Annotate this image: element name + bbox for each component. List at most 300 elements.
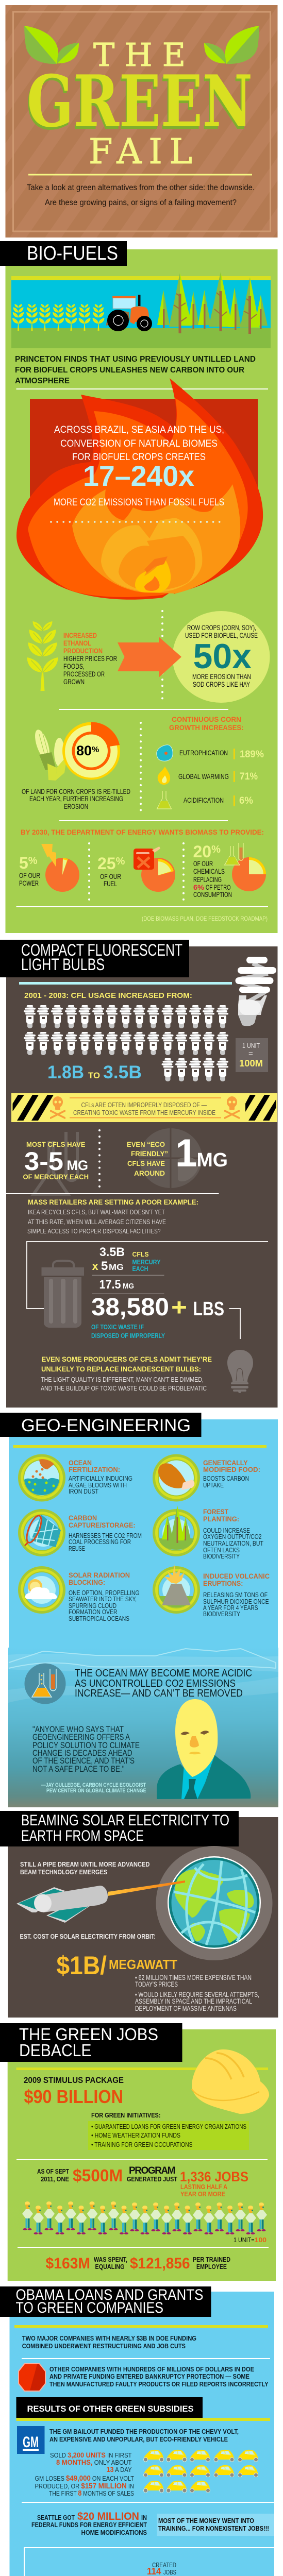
stat: spending per employee: $163M: [45, 2255, 90, 2272]
stat: 80 percent: 80: [76, 743, 92, 758]
stat: 20 percent chemicals: %: [211, 844, 221, 855]
text: continuous corn heading: CONTINUOUS CORN: [172, 715, 241, 723]
text: solar radiation blocking: SEAWATER INTO THE SKY,: [69, 1595, 137, 1603]
text: ethanol production: PROCESSED OR: [63, 670, 105, 678]
text: producers admit: [41, 1355, 212, 1392]
text: solar radiation blocking: SOLAR RADIATION: [69, 1571, 130, 1579]
section heading: CFL: LIGHT BULBS: [21, 955, 105, 974]
text: GM bailout: [49, 2428, 239, 2443]
callout: emissions statement: CONVERSION OF NATURAL BIOMES: [60, 438, 218, 449]
callout: training money: [157, 2514, 274, 2536]
panel: geo-engineering: [0, 1413, 278, 1807]
section heading: green jobs: [0, 2023, 182, 2062]
section heading: geo-engineering: [0, 1413, 201, 1437]
stat: 25 percent fuel: %: [116, 856, 125, 867]
arrow: ethanol to erosion: [118, 637, 181, 677]
text: cost bullets: • 62 MILLION TIMES MORE EXPENSIVE THAN: [135, 1974, 252, 1981]
stat: 25 percent fuel: OF OUR: [100, 873, 121, 880]
headline: princeton finding: FOR BIOFUEL CROPS UNLEASHES NEW CARBON INTO OUR: [15, 366, 244, 375]
text: ethanol production: HIGHER PRICES FOR: [63, 655, 117, 663]
callout: ocean acidity: [75, 1667, 252, 1699]
text: volt sales: PRODUCED, OR $157 MILLION IN: [35, 2482, 134, 2490]
text: land retilled: EROSION: [64, 803, 88, 810]
text: continuous corn heading: [169, 715, 243, 732]
stat: 20 percent chemicals: OF OUR: [193, 860, 213, 868]
stat: 20 percent chemicals: 20: [193, 842, 211, 861]
section heading: green jobs: THE GREEN JOBS: [19, 2025, 158, 2044]
text: forest planting: NEUTRALIZATION, BUT: [203, 1539, 263, 1547]
stat: global warming: [158, 767, 258, 785]
text: ocean fertilization: ALGAE BLOOMS WITH: [69, 1481, 127, 1489]
panel: compact fluorescent light bulbs: [0, 940, 277, 1408]
stat: eco friendly 1 mg: CFLS HAVE: [127, 1159, 165, 1167]
text: producers admit: AND THE BUILDUP OF TOXIC WASTE COULD BE PROBLEMATIC: [41, 1384, 207, 1392]
icon: flask and tube: [225, 843, 243, 865]
text: solar radiation blocking: SUBTROPICAL OCEANS: [69, 1615, 129, 1622]
text: carbon capture: COAL PROCESSING FOR: [69, 1538, 131, 1546]
section heading: CFL: [0, 940, 189, 977]
callout: ocean acidity: THE OCEAN MAY BECOME MORE ACIDIC: [75, 1667, 252, 1679]
legend: 1 unit: 100M: [239, 1058, 263, 1069]
icon: right skull: [225, 1096, 239, 1118]
section heading: obama loans: [0, 2286, 211, 2317]
text: mass retailers: IKEA RECYCLES CFLS, BUT WAL-MART DOESN'T YET: [28, 1208, 165, 1216]
stat: 3-5 mg of mercury: 3-5: [24, 1147, 63, 1176]
section heading: beaming solar: EARTH FROM SPACE: [21, 1827, 144, 1844]
section heading: bio-fuels: [0, 241, 127, 266]
stat: 500M program: PROGRAM: [129, 2165, 175, 2176]
callout: emissions statement: 17–240x: [83, 460, 194, 492]
stat: 500M program: 2011, ONE: [41, 2175, 69, 2183]
text: volt sales: THE FIRST 8 MONTHS OF SALES: [49, 2489, 134, 2498]
text: ocean fertilization: IRON DUST: [69, 1487, 98, 1495]
icon: large CFL bulb: [235, 957, 276, 1026]
callout: emissions statement: FOR BIOFUEL CROPS CREATES: [72, 452, 206, 463]
section heading: beaming solar: [0, 1811, 239, 1846]
text: volcanic eruption: [203, 1572, 270, 1618]
chart: fuel pie: [141, 858, 175, 892]
icon: jerry can: [134, 846, 160, 870]
icon: flask circle: [25, 1663, 66, 1704]
callout: ocean acidity: AS UNCONTROLLED CO2 EMISSIONS: [75, 1677, 236, 1689]
stat: spending per employee: [45, 2255, 230, 2272]
text: green initiatives: [88, 2111, 249, 2150]
callout: 50x erosion circle: MORE EROSION THAN: [192, 673, 251, 681]
text: green initiatives: FOR GREEN INITIATIVES:: [91, 2111, 161, 2119]
headline: princeton finding: PRINCETON FINDS THAT USING PREVIOUSLY UNTILLED LAND: [15, 355, 256, 364]
callout: 50x erosion circle: 50x: [193, 637, 252, 676]
stat: 3-5 mg of mercury: MOST CFLS HAVE: [26, 1140, 86, 1148]
pictogram: workers row: [22, 2201, 267, 2234]
text: volcanic eruption: ERUPTIONS:: [203, 1579, 243, 1587]
callout: emissions statement: [54, 425, 224, 508]
heading: results of other green subsidies: RESULTS OF OTHER GREEN SUBSIDIES: [27, 2404, 194, 2414]
calculation: mercury waste: OF TOXIC WASTE IF: [91, 1324, 144, 1331]
stat: 500M program: GENERATED JUST: [127, 2175, 177, 2183]
pictogram: bulbs third row: [162, 1058, 228, 1081]
icon: right leaves: [204, 26, 259, 64]
calculation: mercury waste: x: [92, 1260, 99, 1273]
calculation: mercury waste: 3.5B: [99, 1245, 125, 1259]
text: ethanol production: FOODS,: [63, 663, 85, 670]
text: land retilled: [22, 788, 130, 810]
text: genetically modified food: BOOSTS CARBON: [203, 1475, 249, 1482]
stat: spending per employee: $121,856: [130, 2255, 190, 2272]
legend: 1 unit 100: 1 UNIT=: [234, 2236, 255, 2244]
title: THE: THE: [93, 36, 186, 74]
text: ethanol production: ETHANOL: [63, 639, 91, 647]
text: pipe dream: [20, 1860, 149, 1876]
icon: genetically modified food: [153, 1454, 200, 1501]
stat: 500M program: YEAR OR MORE: [180, 2190, 225, 2198]
stat: 20 percent chemicals: CHEMICALS: [193, 868, 225, 875]
text: cost bullets: ASSEMBLY IN SPACE AND THE IMPRACTICAL: [135, 1997, 252, 2005]
icon: volcanic eruption: [153, 1564, 200, 1614]
icon: forest planting: [153, 1505, 200, 1556]
text: genetically modified food: MODIFIED FOOD:: [203, 1465, 260, 1473]
text: cost bullets: TODAY'S PRICES: [135, 1980, 178, 1988]
section heading: obama loans: TO GREEN COMPANIES: [15, 2299, 163, 2316]
text: volt sales: GM LOSES $49,000 ON EACH VOLT: [35, 2474, 134, 2483]
banner: hazard warning: CREATING TOXIC WASTE FROM THE MERCURY INSIDE: [73, 1109, 215, 1116]
text: producers admit: EVEN SOME PRODUCERS OF CFLS ADMIT THEY'RE: [41, 1355, 212, 1363]
text: ocean fertilization: OCEAN: [69, 1459, 92, 1467]
quote: jay gulledge: CHANGE IS DECADES AHEAD: [32, 1749, 132, 1758]
text: seattle funding: $20 MILLION: [77, 2511, 139, 2522]
icon: trash can: [41, 1261, 84, 1328]
stat: 3-5 mg of mercury: OF MERCURY EACH: [23, 1173, 89, 1181]
text: stimulus package: $90 BILLION: [24, 2086, 123, 2107]
stat: 1.8B to 3.5B: 1.8B: [47, 1062, 84, 1082]
text: carbon capture: HARNESSES THE CO2 FROM: [69, 1532, 142, 1539]
text: cost bullets: [135, 1974, 259, 2012]
pictogram: cars: [143, 2450, 258, 2493]
section heading: green jobs: DEBACLE: [19, 2041, 92, 2060]
icon: solar radiation blocking: [18, 1566, 65, 1614]
icon: hard hat: [192, 2049, 269, 2114]
text: carbon capture: REUSE: [69, 1545, 85, 1552]
text: mass retailers: MASS RETAILERS ARE SETTING A POOR EXAMPLE:: [28, 1198, 198, 1206]
quote: jay gulledge: "ANYONE WHO SAYS THAT: [32, 1725, 124, 1734]
callout: emissions statement: ACROSS BRAZIL, SE ASIA AND THE US,: [54, 425, 224, 435]
stat: acidification: 6%: [239, 795, 253, 806]
illustration: satellite beam: [16, 1880, 185, 1923]
stat: global warming: 71%: [240, 771, 258, 782]
banner: hazard warning: [11, 1093, 277, 1122]
quote: jay gulledge: PEW CENTER ON GLOBAL CLIMATE CHANGE: [46, 1788, 146, 1794]
text: orbit cost: EST. COST OF SOLAR ELECTRICITY FROM ORBIT:: [20, 1933, 156, 1940]
subtitle: Are these growing pains, or signs of a failing movement?: [45, 198, 237, 207]
text: land retilled: EACH YEAR, FURTHER INCREASING: [29, 795, 123, 803]
text: two major companies: TWO MAJOR COMPANIES WITH NEARLY $3B IN DOE FUNDING: [22, 2334, 196, 2342]
section heading: bio-fuels: BIO-FUELS: [27, 243, 118, 264]
icon: tree line: [157, 272, 268, 334]
stat: 20 percent chemicals: OF PETRO: [206, 884, 231, 891]
illustration: farm scene: [11, 272, 271, 348]
panel: bio-fuels: [0, 241, 277, 933]
text: solar radiation blocking: SPURRING CLOUD: [69, 1602, 116, 1609]
text: volt sales: 13 A DAY: [106, 2465, 132, 2473]
text: volcanic eruption: A YEAR FOR 4 YEARS: [203, 1604, 258, 1612]
text: two major companies: COMBINED UNDERWENT RESTRUCTURING AND JOB CUTS: [22, 2342, 186, 2350]
legend: 1 unit: [236, 1038, 268, 1072]
stat: spending per employee: PER TRAINED: [193, 2256, 230, 2263]
stat: eco friendly 1 mg: EVEN “ECO: [127, 1140, 165, 1148]
icon: GM logo: GM: [23, 2434, 39, 2451]
text: stimulus package: 2009 STIMULUS PACKAGE: [24, 2076, 124, 2085]
stat: 500M program: LASTING HALF A: [180, 2183, 228, 2191]
stat: spending per employee: WAS SPENT,: [94, 2256, 127, 2263]
icon: ghost flask background: [34, 1132, 77, 1194]
calculation: mercury waste: [91, 1245, 224, 1340]
text: solar radiation blocking: BLOCKING:: [69, 1578, 105, 1586]
stat: eco friendly 1 mg: [127, 1131, 228, 1177]
text: orbit cost: $1B/: [57, 1951, 107, 1980]
icon: big wheat: [27, 621, 58, 691]
panel: beaming solar electricity: [0, 1811, 278, 2018]
text: green initiatives: • TRAINING FOR GREEN OCCUPATIONS: [91, 2141, 193, 2148]
text: other companies: [49, 2365, 269, 2388]
callout: ocean acidity: INCREASE— AND CAN'T BE REMOVED: [75, 1687, 243, 1699]
chart: power pie: [45, 858, 79, 892]
stat: 114 jobs: [147, 2561, 176, 2576]
panel: obama loans and grants: [0, 2286, 274, 2576]
stat: eco friendly 1 mg: 1: [175, 1131, 197, 1175]
section heading: beaming solar: BEAMING SOLAR ELECTRICITY TO: [21, 1812, 229, 1829]
panel: green jobs debacle: [0, 2023, 276, 2281]
text: other companies: OTHER COMPANIES WITH HUNDREDS OF MILLIONS OF DOLLARS IN DOE: [49, 2365, 254, 2373]
icon: lightning: [41, 844, 56, 867]
stat: spending per employee: EMPLOYEE: [196, 2263, 227, 2270]
legend: 1 unit 100: 100: [255, 2236, 267, 2244]
icon: wheat row: [12, 304, 104, 331]
headline: princeton finding: ATMOSPHERE: [15, 377, 70, 385]
stat: eutrophication: [157, 745, 264, 761]
callout: training money: MOST OF THE MONEY WENT INTO: [158, 2517, 254, 2524]
stat: 1.8B to 3.5B: [47, 1062, 142, 1082]
stat: eutrophication: 189%: [240, 749, 264, 760]
callout: 50x erosion circle: [172, 611, 270, 703]
headline: princeton finding: [15, 355, 256, 385]
icon: carbon capture: [18, 1509, 65, 1556]
stat: 500M program: 1,336 JOBS: [180, 2169, 248, 2184]
stat: eco friendly 1 mg: AROUND: [134, 1169, 165, 1177]
stat: 500M program: [37, 2165, 248, 2198]
calculation: mercury waste: MG: [109, 1262, 124, 1272]
icon: corn: [32, 728, 67, 781]
calculation: mercury waste: 38,580: [91, 1294, 169, 1321]
stat: acidification: [157, 791, 253, 809]
panel: ocean acidification: [8, 1648, 278, 1807]
quote: jay gulledge: GEOENGINEERING OFFERS A: [32, 1733, 130, 1742]
heading: usage increased: 2001 - 2003: CFL USAGE INCREASED FROM:: [24, 991, 192, 1000]
callout: emissions statement: MORE CO2 EMISSIONS THAN FOSSIL FUELS: [54, 497, 224, 508]
text: pipe dream: BEAM TECHNOLOGY EMERGES: [20, 1868, 107, 1876]
text: GM bailout: THE GM BAILOUT FUNDED THE PRODUCTION OF THE CHEVY VOLT,: [49, 2428, 239, 2435]
icon: left leaves: [24, 26, 79, 64]
title: FAIL: FAIL: [89, 131, 192, 172]
pictogram: bulbs second row: [24, 1032, 228, 1055]
subtitle: [27, 183, 255, 207]
section heading: geo-engineering: GEO-ENGINEERING: [21, 1416, 191, 1435]
text: ethanol production: PRODUCTION: [63, 647, 103, 655]
stat: 25 percent fuel: 25: [97, 854, 116, 873]
text: volcanic eruption: RELEASING 5M TONS OF: [203, 1591, 268, 1599]
text: mass retailers: [27, 1198, 198, 1235]
illustration: globe: [156, 1846, 272, 1960]
stat: eutrophication: EUTROPHICATION: [179, 749, 228, 757]
text: forest planting: [203, 1507, 263, 1560]
stat: 25 percent fuel: [97, 846, 175, 892]
text: orbit cost: MEGAWATT: [109, 1957, 177, 1972]
callout: 50x erosion circle: USED FOR BIOFUEL, CAUSE: [185, 632, 258, 639]
stat: 114 jobs: JOBS: [163, 2568, 176, 2576]
text: genetically modified food: UPTAKE: [203, 1481, 224, 1489]
icon: ocean fertilization: [18, 1454, 65, 1501]
stat: 20 percent chemicals: CONSUMPTION: [193, 891, 232, 899]
text: forest planting: OFTEN LACKS: [203, 1546, 240, 1554]
chart: chemicals pie: [232, 857, 266, 891]
icon: left skull: [51, 1096, 65, 1118]
heading: biomass by 2030: BY 2030, THE DEPARTMENT OF ENERGY WANTS BIOMASS TO PROVIDE:: [21, 828, 264, 836]
illustration: portrait: [157, 1699, 251, 1799]
text: forest planting: PLANTING:: [203, 1515, 239, 1523]
quote: jay gulledge: [32, 1725, 146, 1794]
panel: title banner: [5, 5, 277, 238]
text: ethanol production: GROWN: [63, 678, 85, 686]
text: GM bailout: AN EXPENSIVE AND UNPOPULAR, BUT ECO-FRIENDLY VEHICLE: [49, 2435, 228, 2443]
quote: jay gulledge: OF THE SCIENCE, AND THAT'S: [32, 1756, 135, 1766]
text: ocean fertilization: ARTIFICIALLY INDUCING: [69, 1475, 132, 1482]
text: two major companies: [22, 2334, 196, 2350]
stat: 20 percent chemicals: REPLACING: [193, 876, 222, 884]
stat: 1.8B to 3.5B: 3.5B: [103, 1062, 142, 1082]
stat: acidification: ACIDIFICATION: [184, 796, 224, 804]
section heading: CFL: COMPACT FLUORESCENT: [21, 941, 182, 959]
stat: 5 percent power: POWER: [19, 879, 39, 887]
calculation: mercury waste: LBS: [193, 1298, 224, 1320]
calculation: mercury waste: CFLS: [132, 1250, 149, 1258]
text: orbit cost: [20, 1933, 177, 1980]
calculation: mercury waste: +: [171, 1294, 187, 1320]
stat: 5 percent power: 5: [19, 854, 28, 872]
quote: jay gulledge: NOT A SAFE PLACE TO BE.": [32, 1765, 125, 1774]
stat: 3-5 mg of mercury: MG: [67, 1158, 88, 1173]
text: ocean fertilization: [69, 1459, 132, 1495]
text: volcanic eruption: BIODIVERSITY: [203, 1610, 240, 1618]
icon: GM logo: [17, 2426, 44, 2454]
text: volcanic eruption: INDUCED VOLCANIC: [203, 1572, 270, 1580]
text: carbon capture: [69, 1514, 142, 1552]
calculation: mercury waste: EACH: [132, 1265, 148, 1273]
stat: eco friendly 1 mg: FRIENDLY”: [131, 1149, 168, 1158]
text: volt sales: 8 MONTHS, ONLY ABOUT: [56, 2458, 132, 2466]
text: ethanol production: INCREASED: [63, 632, 97, 639]
stat: 5 percent power: OF OUR: [19, 872, 40, 879]
stat: 114 jobs: CREATED: [152, 2561, 176, 2569]
stat: 25 percent fuel: FUEL: [104, 880, 117, 888]
text: genetically modified food: [203, 1459, 260, 1489]
banner: hazard warning: CFLs ARE OFTEN IMPROPERLY DISPOSED OF —: [81, 1101, 207, 1109]
text: pipe dream: STILL A PIPE DREAM UNTIL MORE ADVANCED: [20, 1860, 149, 1868]
text: ethanol production: [63, 632, 117, 686]
text: carbon capture: CAPTURE/STORAGE:: [69, 1521, 135, 1529]
text: stimulus package: [24, 2076, 124, 2107]
calculation: mercury waste: DISPOSED OF IMPROPERLY: [91, 1332, 165, 1340]
stat: 5 percent power: %: [28, 855, 38, 867]
text: land retilled: OF LAND FOR CORN CROPS IS RE-TILLED: [22, 788, 130, 795]
stat: global warming: GLOBAL WARMING: [178, 773, 229, 781]
section heading: obama loans: OBAMA LOANS AND GRANTS: [15, 2286, 203, 2303]
text: genetically modified food: GENETICALLY: [203, 1459, 248, 1467]
text: solar radiation blocking: ONE OPTION, PROPELLING: [69, 1589, 139, 1597]
callout: 50x erosion circle: ROW CROPS (CORN, SOY),: [187, 624, 256, 632]
text: carbon capture: CARBON: [69, 1514, 97, 1522]
text: mass retailers: AT THIS RATE, WHEN WILL AVERAGE CITIZENS HAVE: [28, 1218, 166, 1226]
stat: 20 percent chemicals: 6%: [193, 884, 204, 891]
text: seattle funding: [31, 2511, 147, 2536]
icon: stop sign: [18, 2363, 46, 2392]
text: producers admit: THE LIGHT QUALITY IS DIFFERENT, MANY CAN'T BE DIMMED,: [41, 1376, 204, 1383]
calculation: mercury waste: MERCURY: [132, 1259, 161, 1266]
text: mass retailers: SIMPLE ACCESS TO PROPER DISPOSAL FACILITIES?: [27, 1227, 161, 1235]
callout: 50x erosion circle: SOD CROPS LIKE HAY: [193, 681, 250, 688]
text: forest planting: FOREST: [203, 1507, 228, 1516]
text: seattle funding: FEDERAL FUNDS FOR ENERGY EFFICIENT: [31, 2521, 147, 2529]
text: other companies: AND PRIVATE FUNDING ENTERED BANKRUPTCY PROTECTION — SOME: [49, 2372, 249, 2380]
text: forest planting: COULD INCREASE: [203, 1527, 250, 1534]
text: solar radiation blocking: FORMATION OVER: [69, 1608, 118, 1616]
text: solar radiation blocking: [69, 1571, 139, 1622]
text: continuous corn heading: GROWTH INCREASES:: [169, 723, 243, 732]
icon: incandescent bulb: [227, 1350, 253, 1393]
stat: 5 percent power: [19, 844, 79, 892]
stat: spending per employee: EQUALING: [95, 2263, 125, 2270]
icon: tractor: [106, 295, 152, 331]
pictogram: bulbs first row: [24, 1005, 228, 1028]
stat: 500M program: $500M: [73, 2166, 123, 2185]
calculation: mercury waste: 5: [101, 1259, 108, 1273]
stat: eco friendly 1 mg: MG: [197, 1149, 228, 1171]
text: seattle funding: HOME MODIFICATIONS: [81, 2529, 147, 2536]
quote: jay gulledge: —JAY GULLEDGE, CARBON CYCLE ECOLOGIST: [41, 1782, 146, 1788]
text: seattle funding: IN: [141, 2514, 147, 2521]
legend: 1 unit: =: [248, 1049, 253, 1058]
text: cost bullets: DEPLOYMENT OF MASSIVE ANTENNAS: [135, 2005, 237, 2012]
text: forest planting: OXYGEN OUTPUT/CO2: [203, 1533, 262, 1540]
text: producers admit: UNLIKELY TO REPLACE INCANDESCENT BULBS:: [41, 1365, 201, 1373]
text: green initiatives: • HOME WEATHERIZATION FUNDS: [91, 2131, 180, 2139]
text: ocean fertilization: FERTILIZATION:: [69, 1465, 120, 1473]
illustration: fire panel: [16, 378, 263, 600]
stat: 80 percent: %: [92, 745, 99, 754]
text: volt sales: [35, 2451, 134, 2498]
subtitle: Take a look at green alternatives from the other side: the downside.: [27, 183, 255, 192]
text: forest planting: BIODIVERSITY: [203, 1552, 240, 1560]
stat: 500M program: AS OF SEPT: [37, 2167, 69, 2175]
text: volt sales: SOLD 3,200 UNITS IN FIRST: [50, 2451, 132, 2459]
heading: results of other green subsidies: [16, 2397, 203, 2418]
calculation: mercury waste: 17.5: [99, 1278, 121, 1292]
icon: ghost globe background: [139, 1128, 202, 1188]
text: seattle funding: SEATTLE GOT: [37, 2514, 75, 2521]
illustration: corn donut 80 percent: [32, 722, 120, 781]
quote: jay gulledge: POLICY SOLUTION TO CLIMATE: [32, 1741, 140, 1750]
calculation: mercury waste: MG: [123, 1282, 134, 1291]
legend: 1 unit: 1 UNIT: [242, 1042, 260, 1049]
stat: 1.8B to 3.5B: TO: [88, 1071, 100, 1080]
stat: 3-5 mg of mercury: [23, 1140, 89, 1181]
